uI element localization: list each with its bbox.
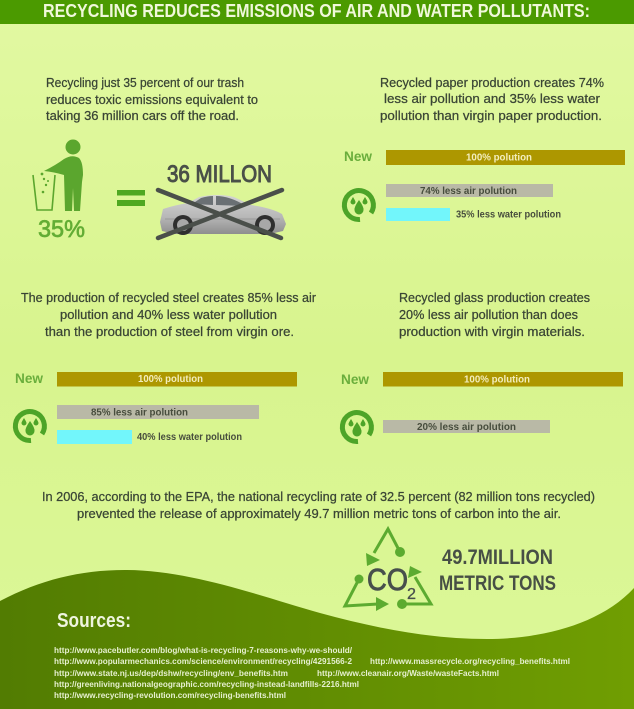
icon: recycling water drops	[342, 413, 371, 442]
text block: glass fact	[399, 291, 590, 339]
icon: CO2 recycling triangle	[345, 529, 431, 611]
text block: source URLs: http://www.state.nj.us/dep/dshw/recycling/env_benefits.htm	[54, 669, 288, 678]
text block: steel fact	[21, 291, 316, 339]
bar: 100% pollution	[386, 150, 625, 165]
text block: source URLs: http://www.recycling-revolution.com/recycling-benefits.html	[54, 691, 286, 700]
text block: steel fact: pollution and 40% less water pollution	[60, 308, 277, 322]
bar: 85% less air pollution	[57, 405, 259, 419]
icon: person throwing trash into bin	[33, 140, 83, 211]
bar: 100% pollution: 100% polution	[464, 374, 530, 386]
text block: paper fact: pollution than virgin paper production.	[380, 109, 602, 123]
text block: EPA recycling rate: prevented the release of approximately 49.7 million metric tons of carbon into the air.	[77, 507, 561, 521]
text block: EPA recycling rate	[42, 490, 595, 521]
text block: source URLs: http://www.popularmechanics.com/science/environment/recycling/4291566-2	[54, 657, 353, 666]
icon: equals sign	[117, 190, 145, 206]
icon: CO2 recycling triangle: CO	[367, 562, 408, 597]
label: 49.7 million metric tons	[439, 546, 556, 595]
bar: 20% less air pollution	[383, 420, 550, 433]
text block: steel fact: The production of recycled steel creates 85% less air	[21, 291, 316, 305]
bar: 100% pollution: 100% polution	[466, 152, 532, 164]
text block: paper fact	[380, 76, 604, 123]
label: 49.7 million metric tons: 49.7MILLION	[442, 546, 553, 569]
panel: recycled paper	[344, 76, 625, 221]
text block: steel fact: than the production of steel from virgin ore.	[45, 325, 294, 339]
text block: paper fact: Recycled paper production creates 74%	[380, 76, 604, 90]
text block: glass fact: 20% less air pollution than does	[399, 308, 578, 322]
footer: green wave	[0, 570, 634, 709]
text block: trash recycling fact: taking 36 million cars off the road.	[46, 109, 239, 123]
text block: source URLs: http://www.cleanair.org/Waste/wasteFacts.html	[317, 669, 499, 678]
icon: recycling water drops	[344, 191, 373, 220]
label: 35%: 35%	[38, 216, 85, 243]
text block: trash recycling fact: reduces toxic emissions equivalent to	[46, 93, 258, 107]
bar: 40% less water pollution	[57, 430, 242, 444]
label: New: New	[344, 148, 372, 164]
label: New: New	[341, 371, 369, 387]
text block: source URLs: http://greenliving.nationalgeographic.com/recycling-instead-landfills-2216.html	[54, 680, 359, 689]
text block: source URLs: http://www.pacebutler.com/blog/what-is-recycling-7-reasons-why-we-should/	[54, 646, 353, 655]
bar: 40% less water pollution: 40% less water polution	[137, 432, 242, 443]
heading: Sources: Sources:	[57, 610, 131, 632]
panel: recycled glass	[341, 291, 623, 442]
bar: 74% less air pollution	[386, 184, 553, 197]
label: New: New	[15, 370, 43, 386]
bar: 35% less water pollution: 35% less water polution	[456, 210, 561, 220]
bar: 100% pollution	[383, 372, 623, 386]
icon: recycling water drops	[15, 412, 44, 441]
icon: CO2 recycling triangle: 2	[407, 586, 416, 603]
label: 49.7 million metric tons: METRIC TONS	[439, 572, 556, 595]
text block: paper fact: less air pollution and 35% less water	[384, 92, 600, 106]
bar: 85% less air pollution: 85% less air polution	[91, 408, 188, 418]
icon: crossed out car	[158, 190, 286, 238]
bar: 20% less air pollution: 20% less air polution	[417, 422, 516, 433]
bar: 35% less water pollution	[386, 208, 561, 221]
label: 36 MILLON: 36 MILLON	[167, 161, 272, 188]
panel: 35 percent trash equals 36 million cars	[33, 76, 286, 243]
text block: source URLs	[54, 646, 570, 700]
text block: glass fact: Recycled glass production creates	[399, 291, 590, 305]
text block: trash recycling fact: Recycling just 35 percent of our trash	[46, 76, 244, 90]
text block: source URLs: http://www.massrecycle.org/recycling_benefits.html	[370, 657, 570, 666]
text block: trash recycling fact	[46, 76, 258, 123]
bar: 100% pollution: 100% polution	[138, 374, 203, 385]
panel: recycled steel	[15, 291, 316, 444]
bar: 100% pollution	[57, 372, 297, 386]
text block: EPA recycling rate: In 2006, according to the EPA, the national recycling rate of 32.5 percent (82 million tons recycled)	[42, 490, 595, 504]
text block: glass fact: production with virgin materials.	[399, 325, 585, 339]
bar: 74% less air pollution: 74% less air polution	[420, 186, 517, 197]
